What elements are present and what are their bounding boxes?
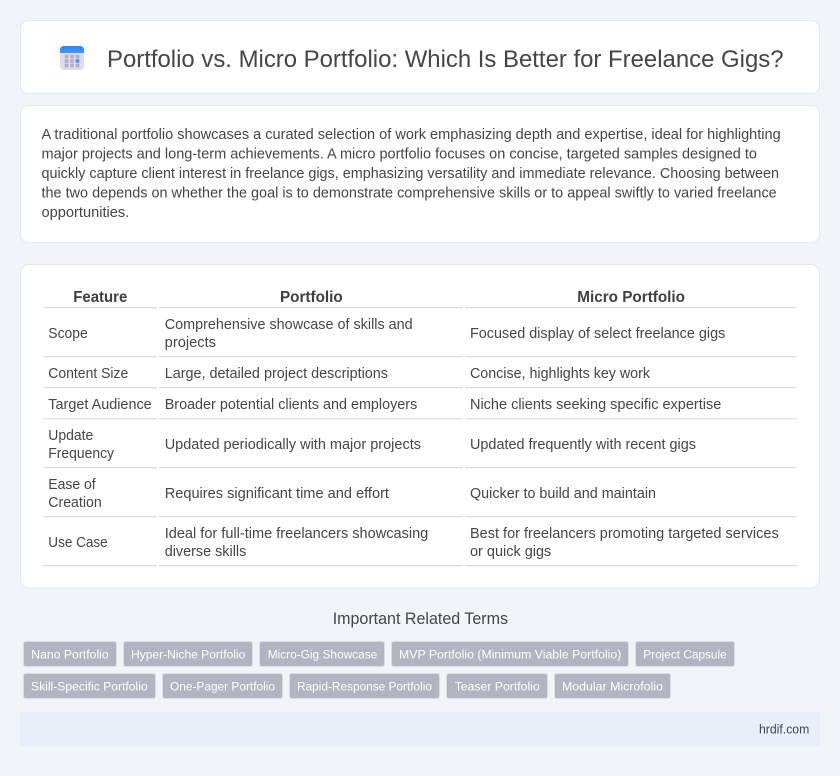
tag [554, 674, 670, 698]
tag: Skill-Specific Portfolio [31, 679, 148, 693]
tag: Rapid-Response Portfolio [297, 679, 432, 693]
tag: Teaser Portfolio [455, 679, 540, 693]
footer [20, 712, 820, 746]
table header [73, 289, 685, 306]
row: scope: Comprehensive showcase of skills and [165, 317, 413, 333]
row: target audience: Niche clients seeking specific expertise [470, 397, 721, 413]
row: ease of creation: Creation [48, 495, 102, 511]
table header: Micro Portfolio [577, 289, 685, 306]
row: use case: Ideal for full-time freelancers showcasing [165, 526, 428, 542]
row: content size: Concise, highlights key work [470, 366, 651, 382]
row: use case: or quick gigs [470, 544, 551, 560]
tag: Nano Portfolio [31, 647, 109, 661]
text block: description: opportunities. [42, 205, 129, 221]
row: target audience: Target Audience [48, 397, 152, 413]
title: Portfolio vs. Micro Portfolio: Which Is Better for Freelance Gigs? [107, 46, 784, 73]
row: update frequency: Frequency [48, 446, 115, 462]
tags: related terms [24, 642, 734, 698]
row: scope [48, 317, 725, 351]
row: scope: Scope [48, 326, 88, 342]
row: update frequency: Updated periodically with major projects [165, 437, 421, 453]
tag [24, 674, 156, 698]
tag: Micro-Gig Showcase [268, 647, 377, 661]
text block: description: major projects and long-term achievements. A micro portfolio focuses on concise, targeted samples designed to [42, 146, 757, 162]
row: ease of creation: Requires significant time and effort [165, 486, 389, 502]
text block: description: the two depends on whether the goal is to demonstrate comprehensive skills or to appeal swiftly to varied freelance [42, 186, 777, 202]
panel: title card [20, 20, 820, 94]
footer: hrdif.com [759, 721, 809, 736]
tag: One-Pager Portfolio [170, 679, 275, 693]
row: update frequency: Updated frequently with recent gigs [470, 437, 696, 453]
table header: Feature [73, 289, 128, 306]
row: ease of creation: Ease of [48, 477, 97, 493]
row: scope: projects [165, 335, 216, 351]
tag [636, 642, 734, 666]
text block: description: quickly capture client interest in freelance gigs, emphasizing versatility and immediate relevance. Choosing between [42, 166, 779, 182]
row: scope: Focused display of select freelance gigs [470, 326, 725, 342]
tag: Modular Microfolio [562, 679, 663, 693]
row: update frequency [48, 428, 696, 462]
text block: description: A traditional portfolio showcases a curated selection of work emphasizing depth and expertise, ideal for highlighting [42, 127, 781, 143]
tag: MVP Portfolio (Minimum Viable Portfolio) [399, 647, 621, 661]
row: use case: Best for freelancers promoting targeted services [470, 526, 779, 542]
tag [124, 642, 252, 666]
row: use case: diverse skills [165, 544, 246, 560]
row: content size [48, 366, 651, 382]
text block: description [42, 127, 781, 221]
row: update frequency: Update [48, 428, 93, 444]
tag: Hyper-Niche Portfolio [131, 647, 245, 661]
row: ease of creation: Quicker to build and maintain [470, 486, 656, 502]
row: target audience: Broader potential clients and employers [165, 397, 417, 413]
tag [290, 674, 440, 698]
row: use case [48, 526, 779, 560]
tag [24, 642, 116, 666]
heading: related terms: Important Related Terms [333, 610, 508, 628]
row: ease of creation [48, 477, 656, 511]
row: content size: Large, detailed project descriptions [165, 366, 388, 382]
tag [260, 642, 384, 666]
panel: description [20, 106, 820, 242]
tag: Project Capsule [643, 647, 727, 661]
row: use case: Use Case [48, 535, 108, 551]
tag [162, 674, 282, 698]
tag [392, 642, 628, 666]
icon: calendar [60, 46, 84, 70]
panel: comparison table [20, 264, 820, 588]
tag [446, 674, 548, 698]
table header: Portfolio [280, 289, 343, 306]
row: content size: Content Size [48, 366, 128, 382]
row: target audience [48, 397, 721, 413]
